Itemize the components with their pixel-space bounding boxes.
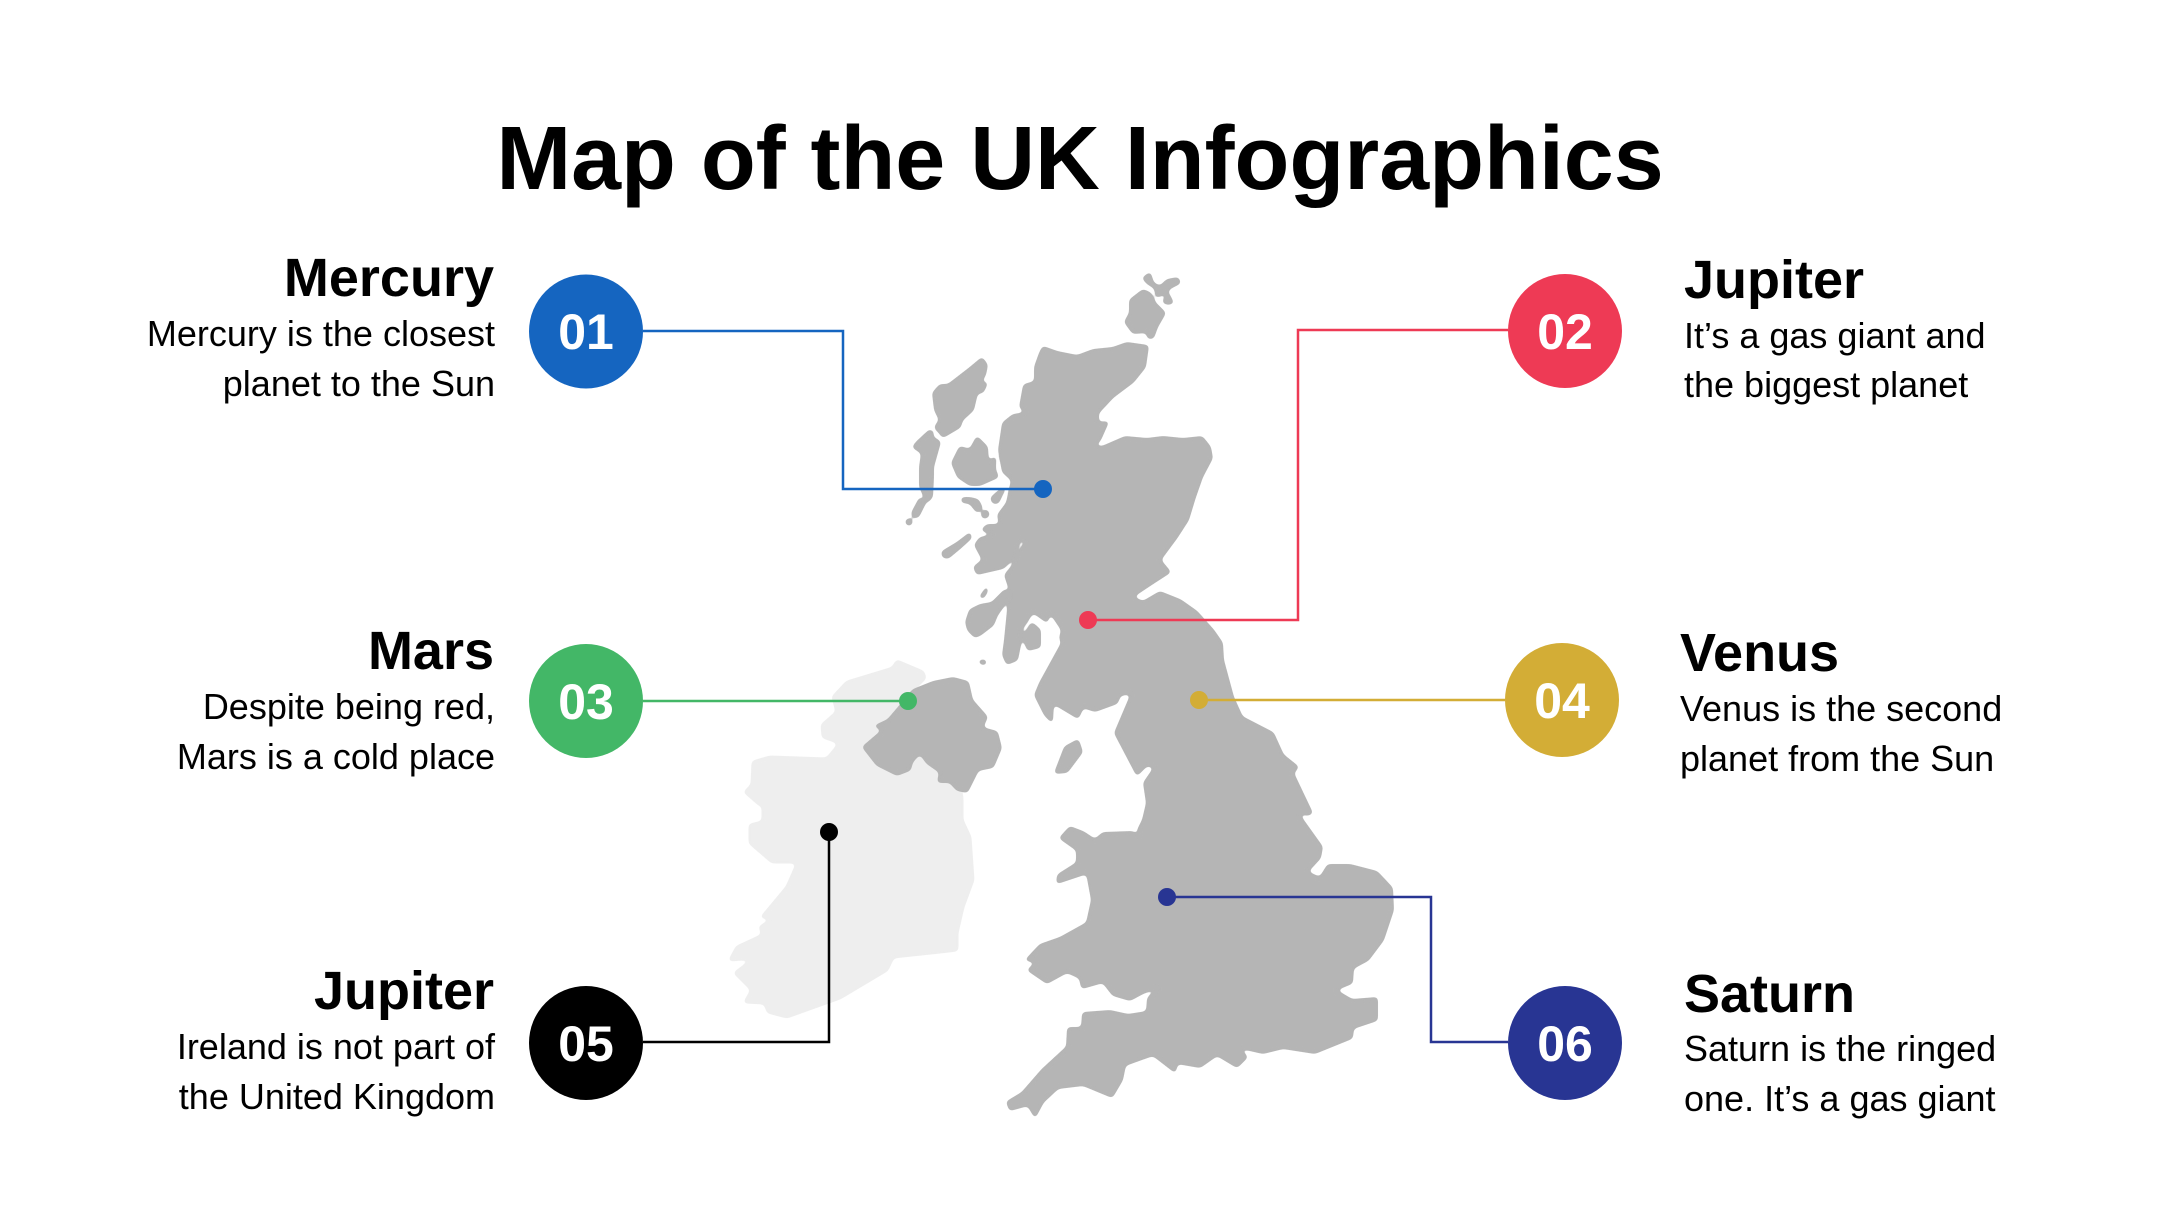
badge 03 [529, 644, 643, 758]
panel: 01 Mercury [147, 248, 643, 404]
badge 02: 02 [1537, 304, 1593, 360]
map: Great Britain [863, 273, 1393, 1117]
badge 01: 01 [558, 304, 614, 360]
location dot 01 [1034, 480, 1052, 498]
text: Ireland description: Ireland is not part of [177, 1026, 496, 1067]
map: Northern Ireland [863, 678, 1001, 792]
map: Lewis and Harris [933, 358, 987, 437]
map: northern isles [1143, 273, 1180, 304]
connector 02 [1088, 330, 1508, 620]
panel: 02 Jupiter [1508, 250, 1986, 405]
badge 06: 06 [1537, 1016, 1593, 1072]
title: Map of the UK Infographics [496, 109, 1664, 209]
location dot 02 [1079, 611, 1097, 629]
badge 05 [529, 986, 643, 1100]
badge 04: 04 [1534, 673, 1590, 729]
connector 04 [1199, 699, 1505, 701]
map: small isles [962, 488, 1005, 518]
heading: Mars: Mars [368, 621, 494, 681]
location dot 03 [899, 692, 917, 710]
connector 06 [1167, 897, 1508, 1042]
heading: Venus: Venus [1680, 623, 1839, 683]
map: Uist [913, 430, 940, 502]
text: Mars description: Mars is a cold place [177, 736, 495, 777]
panel: 05 Jupiter [177, 961, 643, 1117]
map: Arran [1023, 623, 1040, 650]
map: Orkney islands [1125, 290, 1165, 338]
map of the UK and Ireland [730, 273, 1393, 1117]
text: Mercury description: planet to the Sun [223, 363, 495, 404]
badge 05: 05 [558, 1016, 614, 1072]
map: Barra [906, 498, 925, 525]
badge 04 [1505, 643, 1619, 757]
connector 05 [643, 832, 829, 1042]
heading: Jupiter: Jupiter [1684, 250, 1864, 310]
text: Venus description: planet from the Sun [1680, 738, 1994, 779]
map: Islay and Jura [966, 587, 1008, 637]
text: Mars description: Despite being red, [203, 686, 495, 727]
text: Jupiter description: It’s a gas giant and [1684, 315, 1986, 356]
map: Skye [952, 437, 998, 485]
map: Isle of Man [1055, 740, 1082, 773]
panel: 04 Venus [1505, 623, 2002, 779]
heading: Mercury: Mercury [284, 248, 494, 308]
connector 01 [643, 331, 1043, 489]
badge 06 [1508, 986, 1622, 1100]
panel: 03 Mars [177, 621, 643, 777]
location dot 05 [820, 823, 838, 841]
map: Great Britain mainland [974, 343, 1393, 1117]
map: Tiree and Coll [942, 533, 971, 558]
text: Mercury description: Mercury is the closest [147, 313, 495, 354]
heading: Saturn: Saturn [1684, 964, 1855, 1024]
connector 03 [643, 700, 908, 702]
map: Ireland [730, 661, 973, 1017]
text: Ireland description: the United Kingdom [179, 1076, 495, 1117]
text: Saturn description: one. It’s a gas giant [1684, 1078, 1996, 1119]
location dot 06 [1158, 888, 1176, 906]
map: Rathlin island [979, 660, 986, 664]
text: Jupiter description: the biggest planet [1684, 364, 1968, 405]
text: Saturn description: Saturn is the ringed [1684, 1028, 1996, 1069]
panel: 06 Saturn [1508, 964, 1996, 1119]
text: Venus description: Venus is the second [1680, 688, 2002, 729]
badge 01 [529, 274, 643, 388]
heading: Jupiter: Jupiter [314, 961, 494, 1021]
badge 03: 03 [558, 674, 614, 730]
badge 02 [1508, 274, 1622, 388]
location dot 04 [1190, 691, 1208, 709]
